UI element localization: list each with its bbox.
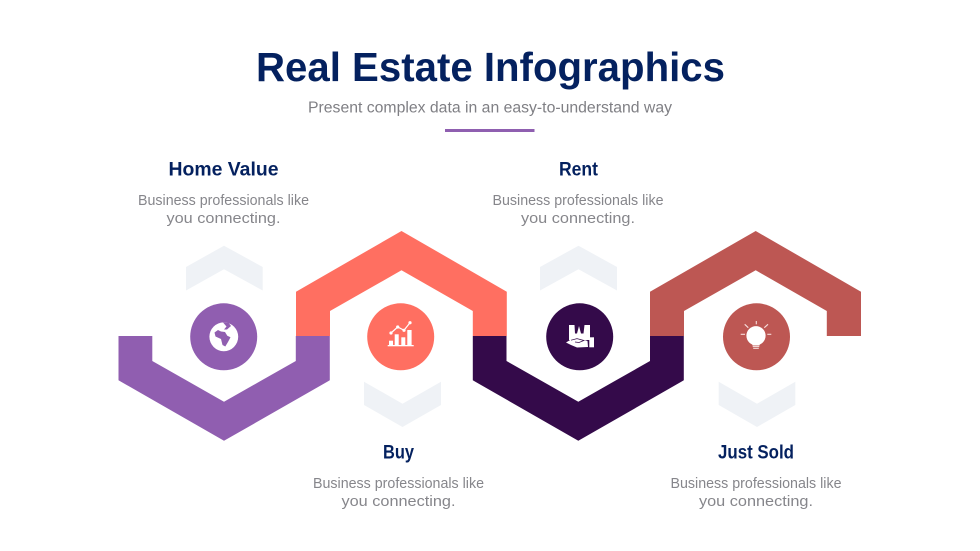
header: [256, 44, 725, 132]
band: coral roof: [296, 231, 507, 336]
chevron: down: [719, 382, 795, 427]
chevron: up: [186, 246, 263, 290]
icon: rising chart: [367, 303, 434, 370]
description: Home Value: you connecting.: [166, 210, 280, 227]
description: Just Sold: [670, 475, 842, 510]
description: Home Value: Business professionals like: [138, 192, 309, 209]
description: Rent: Business professionals like: [492, 192, 664, 209]
description: Rent: you connecting.: [521, 210, 635, 227]
chevron: down: [364, 382, 441, 427]
heading: Buy: Buy: [383, 442, 414, 464]
description: Buy: you connecting.: [342, 493, 456, 510]
description: Just Sold: Business professionals like: [670, 475, 842, 492]
heading: Home Value: Home Value: [168, 158, 279, 180]
title: Real Estate Infographics: [256, 44, 725, 90]
panel: Home Value: [118, 158, 330, 441]
description: Buy: [313, 475, 484, 510]
band: dark purple valley: [473, 336, 684, 441]
panel: Rent: [473, 158, 684, 441]
chevron: up: [540, 246, 617, 290]
band: purple valley: [118, 336, 330, 441]
panel: Just Sold: [650, 231, 861, 510]
heading: Just Sold: Just Sold: [718, 442, 794, 464]
subtitle: Present complex data in an easy-to-understand way: [308, 100, 672, 116]
description: Buy: Business professionals like: [313, 475, 484, 492]
icon: light bulb: [723, 303, 790, 370]
accent underline: [445, 129, 534, 132]
band: brick roof: [650, 231, 861, 336]
description: Rent: [492, 192, 664, 227]
heading: Rent: Rent: [559, 158, 598, 180]
description: Just Sold: you connecting.: [699, 493, 813, 510]
icon: hand holding building: [546, 303, 613, 370]
icon: globe: [190, 303, 257, 370]
panel: Buy: [296, 231, 507, 510]
description: Home Value: [138, 192, 309, 227]
